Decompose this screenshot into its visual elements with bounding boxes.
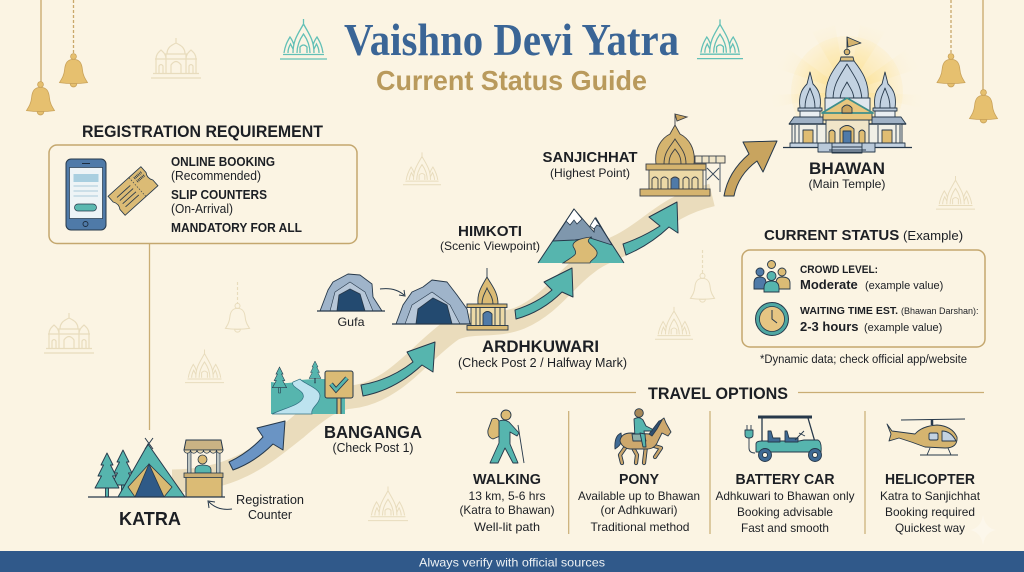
stop: Katra bbox=[88, 438, 304, 529]
heading: current status: CURRENT STATUS bbox=[764, 227, 899, 244]
title: Vaishno Devi Yatra bbox=[344, 15, 679, 65]
label: Katra: KATRA bbox=[119, 509, 181, 529]
icon: registration kiosk bbox=[184, 440, 223, 497]
text: recommended: (Recommended) bbox=[171, 169, 261, 183]
icon: Ardhkuwari temple bbox=[467, 268, 508, 330]
icon: tent bbox=[118, 438, 185, 497]
stop: Sanjichhat bbox=[542, 114, 725, 196]
panel: travel options bbox=[456, 385, 984, 535]
icon: golf cart bbox=[745, 417, 822, 462]
footer bar bbox=[0, 551, 1024, 572]
text: on-arrival: (On-Arrival) bbox=[171, 202, 233, 216]
title: walking: WALKING bbox=[473, 472, 541, 488]
label: counter: Counter bbox=[248, 508, 292, 522]
status box bbox=[742, 250, 985, 347]
title: pony: PONY bbox=[619, 472, 659, 488]
icon: trees bbox=[95, 450, 135, 497]
detail: route: Adhkuwari to Bhawan only bbox=[716, 489, 854, 503]
decorative sparkle bbox=[970, 515, 996, 545]
arrow: teal Banganga to Ardhkuwari bbox=[361, 342, 435, 396]
detail: fast: Fast and smooth bbox=[741, 521, 829, 535]
title: helicopter: HELICOPTER bbox=[885, 472, 976, 488]
icon: phone bbox=[66, 159, 106, 230]
text: waiting time: WAITING TIME EST. bbox=[800, 305, 898, 317]
text: slip counters: SLIP COUNTERS bbox=[171, 188, 267, 202]
label: check post 1: (Check Post 1) bbox=[332, 441, 414, 455]
option: pony bbox=[578, 409, 700, 534]
detail: available: Available up to Bhawan bbox=[578, 489, 700, 503]
detail: booking: Booking required bbox=[885, 505, 975, 519]
heading: current status: (Example) bbox=[903, 228, 963, 243]
arrow: to kiosk bbox=[208, 501, 232, 509]
text: crowd level: CROWD LEVEL: bbox=[800, 264, 878, 276]
label: Sanjichhat: SANJICHHAT bbox=[542, 149, 638, 166]
label: Banganga: BANGANGA bbox=[324, 422, 422, 442]
option: helicopter bbox=[880, 419, 981, 535]
glow halo bbox=[791, 36, 903, 148]
icon: small cave bbox=[317, 274, 385, 311]
footer text: Always verify with official sources bbox=[419, 556, 605, 570]
connector line from registration box bbox=[148, 243, 150, 430]
text: moderate: Moderate bbox=[800, 277, 858, 292]
detail: traditional: Traditional method bbox=[590, 520, 690, 534]
detail: distance: 13 km, 5-6 hrs bbox=[468, 489, 546, 503]
text: moderate: (example value) bbox=[865, 280, 943, 292]
detail: route: Katra to Sanjichhat bbox=[880, 489, 981, 503]
decorative teal temple right bbox=[697, 19, 743, 59]
label: Gufa: Gufa bbox=[338, 315, 365, 329]
glow rays behind temple bbox=[770, 25, 925, 108]
faint background temples and bells bbox=[44, 38, 975, 521]
hanging bells left bbox=[26, 0, 88, 115]
icon: walker bbox=[488, 410, 524, 463]
label: check post 2: (Check Post 2 / Halfway Mark) bbox=[458, 356, 627, 370]
icon: river and check post bbox=[271, 361, 353, 414]
option: walking bbox=[460, 410, 554, 534]
detail: route: (Katra to Bhawan) bbox=[460, 503, 554, 517]
detail: or adhkuwari: (or Adhkuwari) bbox=[600, 503, 678, 517]
stop: Bhawan bbox=[770, 25, 925, 191]
text: waiting time: (Bhawan Darshan): bbox=[901, 306, 979, 316]
icon: Bhawan temple bbox=[783, 37, 912, 153]
label: Ardhkuwari: ARDHKUWARI bbox=[482, 337, 599, 356]
label: scenic viewpoint: (Scenic Viewpoint) bbox=[440, 239, 540, 253]
title: battery car: BATTERY CAR bbox=[736, 472, 835, 488]
heading: travel options: TRAVEL OPTIONS bbox=[648, 385, 788, 403]
panel: registration requirement bbox=[49, 123, 357, 244]
hanging bells right bbox=[937, 0, 998, 123]
icon: crowd bbox=[754, 260, 790, 292]
arrow: blue Katra to Banganga bbox=[229, 421, 285, 470]
icon: large cave bbox=[392, 280, 473, 324]
label: Bhawan: BHAWAN bbox=[809, 159, 885, 178]
arrow: gold Sanjichhat to Bhawan bbox=[724, 141, 777, 196]
icon: Sanjichhat temple bbox=[640, 114, 725, 196]
icon: clock bbox=[756, 302, 788, 336]
icon: horse and rider bbox=[615, 409, 671, 463]
arrow: cave to cave bbox=[380, 289, 405, 296]
text: hours: (example value) bbox=[864, 322, 942, 334]
text: hours: 2-3 hours bbox=[800, 319, 859, 334]
icon: helicopter bbox=[887, 419, 965, 455]
stop: Ardhkuwari bbox=[392, 268, 627, 370]
text: mandatory for all: MANDATORY FOR ALL bbox=[171, 221, 302, 235]
note: dynamic data: *Dynamic data; check official app/website bbox=[760, 354, 967, 366]
panel: current status bbox=[742, 227, 985, 347]
label: Himkoti: HIMKOTI bbox=[458, 224, 522, 240]
winding path ribbon bbox=[172, 195, 712, 481]
heading: registration requirement: REGISTRATION REQUIREMENT bbox=[82, 123, 323, 141]
detail: path: Well-lit path bbox=[474, 520, 540, 534]
label: highest point: (Highest Point) bbox=[550, 166, 630, 180]
registration box bbox=[49, 145, 357, 244]
arrow: teal Himkoti to Sanjichhat bbox=[623, 202, 678, 255]
stop: Banganga bbox=[271, 361, 422, 455]
icon: mountains bbox=[538, 209, 624, 263]
label: main temple: (Main Temple) bbox=[808, 177, 886, 191]
label: registration counter: Registration bbox=[236, 493, 304, 507]
arrow: teal Ardhkuwari to Himkoti bbox=[515, 268, 573, 319]
option: battery car bbox=[716, 417, 854, 535]
decorative teal temple left bbox=[280, 19, 327, 59]
ground line bbox=[88, 496, 225, 498]
detail: quickest: Quickest way bbox=[895, 521, 965, 535]
detail: booking: Booking advisable bbox=[737, 505, 833, 519]
text: online booking: ONLINE BOOKING bbox=[171, 155, 275, 169]
stop: Gufa cave bbox=[317, 274, 405, 329]
stop: Himkoti bbox=[440, 209, 624, 263]
subtitle: Current Status Guide bbox=[376, 65, 647, 96]
icon: ticket bbox=[108, 167, 158, 215]
